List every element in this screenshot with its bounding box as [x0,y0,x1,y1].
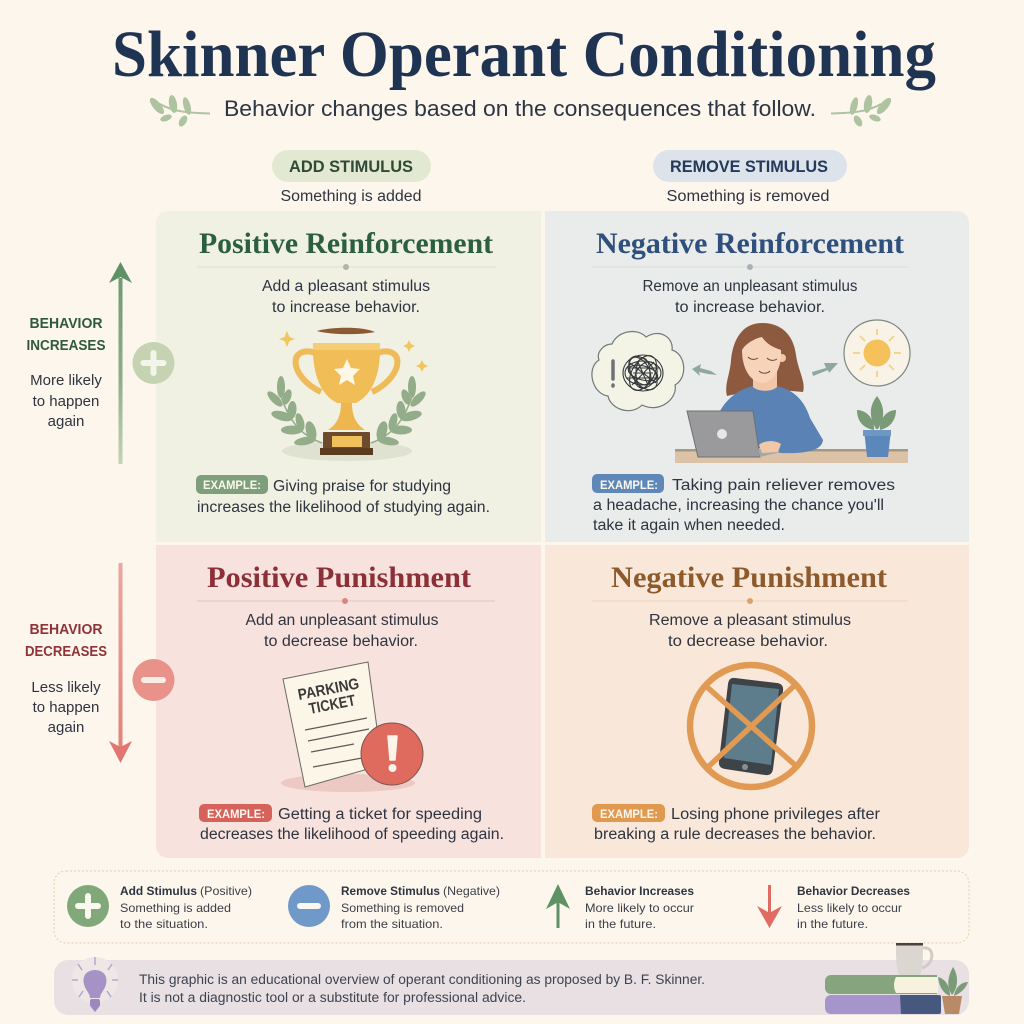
legend: behavior increases: More likely to occur [585,901,694,915]
example: positive punishment [199,804,504,843]
column header: remove stimulus [653,150,847,205]
subtitle with leaf ornaments: Behavior changes based on the consequences that follow. [224,96,816,121]
example: positive reinforcement: EXAMPLE: [203,478,261,492]
legend: add stimulus: (Positive) [200,884,252,898]
example: positive punishment: EXAMPLE: [207,807,265,821]
axis: behavior decreases: BEHAVIOR [30,622,103,638]
example: negative reinforcement: EXAMPLE: [600,478,658,492]
icon: trophy with laurel [265,328,428,461]
icon: light bulb [72,957,118,1012]
icon: books, coffee and plant [825,943,968,1014]
icon: potted plant [857,396,896,457]
icon: woman at laptop [675,323,908,463]
legend: behavior increases [546,884,694,931]
legend: remove stimulus [288,884,500,931]
panel: positive reinforcement [156,211,541,542]
example: positive reinforcement: Giving praise for studying [273,478,451,495]
panel: negative punishment: Remove a pleasant stimulus [649,612,851,629]
axis: behavior decreases: Less likely [31,679,101,696]
icon: thought cloud with scribble [592,332,684,411]
example: negative punishment [592,804,880,843]
legend: behavior decreases: in the future. [797,917,868,931]
legend: remove stimulus: from the situation. [341,917,443,931]
example: positive punishment: decreases the likelihood of speeding again. [200,826,504,843]
icon: parking ticket with alert [281,662,423,792]
example: positive punishment: Getting a ticket for speeding [278,806,482,823]
axis: behavior increases: BEHAVIOR [30,316,103,332]
icon: parking ticket with alert: TICKET [308,692,357,718]
column header: remove stimulus: REMOVE STIMULUS [670,158,828,176]
column header: add stimulus: ADD STIMULUS [289,158,413,176]
legend: behavior decreases: Less likely to occur [797,901,902,915]
legend: add stimulus [67,884,252,931]
axis: behavior increases: again [48,413,84,430]
axis: behavior increases: INCREASES [26,338,106,354]
legend: add stimulus: to the situation. [120,917,208,931]
example: negative reinforcement: take it again when needed. [593,517,785,534]
example: negative reinforcement: a headache, increasing the chance you'll [593,497,884,514]
legend: remove stimulus: (Negative) [443,884,500,898]
example: negative punishment: breaking a rule decreases the behavior. [594,826,876,843]
legend: behavior decreases [757,884,910,931]
panel: positive reinforcement: Positive Reinforcement [199,227,493,260]
legend: behavior increases: Behavior Increases [585,884,694,898]
legend: remove stimulus: Remove Stimulus [341,884,440,898]
example: positive reinforcement [196,475,490,516]
example: negative reinforcement [592,474,895,534]
icon: parking ticket with alert: PARKING [297,675,361,704]
axis: behavior decreases [25,563,174,763]
panel: positive punishment [156,545,541,858]
legend: remove stimulus: Something is removed [341,901,464,915]
column header: add stimulus [272,150,431,205]
legend: behavior increases: in the future. [585,917,656,931]
panel: negative punishment: to decrease behavior. [668,633,828,650]
panel: positive punishment: Add an unpleasant stimulus [246,612,439,629]
disclaimer panel [54,943,969,1015]
axis: behavior decreases: DECREASES [25,644,107,660]
legend: add stimulus: Something is added [120,901,231,915]
panel: positive punishment: Positive Punishment [207,561,471,594]
icon: sun [844,320,910,386]
panel: positive reinforcement: Add a pleasant stimulus [262,278,430,295]
legend: behavior decreases: Behavior Decreases [797,884,910,898]
panel: positive punishment: to decrease behavior. [264,633,418,650]
panel: negative reinforcement: Remove an unpleasant stimulus [642,278,858,295]
panel: positive reinforcement: to increase behavior. [272,299,420,316]
column header: add stimulus: Something is added [280,188,422,205]
example: negative punishment: EXAMPLE: [600,807,658,821]
subtitle with leaf ornaments [148,94,893,128]
example: negative punishment: Losing phone privileges after [671,806,880,823]
example: negative reinforcement: Taking pain reliever removes [672,477,895,494]
title: Skinner Operant Conditioning [112,18,936,91]
axis: behavior increases: More likely [30,372,102,389]
panel: negative reinforcement: to increase behavior. [675,299,825,316]
disclaimer panel: This graphic is an educational overview of operant conditioning as proposed by B. F. Skinner. [139,972,705,987]
panel: negative reinforcement: Negative Reinforcement [596,227,904,260]
panel: negative punishment: Negative Punishment [611,561,887,594]
icon: arrows [692,363,838,376]
legend panel [54,871,969,943]
axis: behavior decreases: again [48,719,84,736]
disclaimer panel: It is not a diagnostic tool or a substitute for professional advice. [139,990,526,1005]
axis: behavior increases: to happen [33,393,99,410]
axis: behavior decreases: to happen [33,699,99,716]
axis: behavior increases [26,262,174,464]
legend: add stimulus: Add Stimulus [120,884,197,898]
panel: negative reinforcement [545,211,969,542]
icon: crossed out phone [690,665,812,787]
example: positive reinforcement: increases the likelihood of studying again. [197,499,490,516]
column header: remove stimulus: Something is removed [666,188,830,205]
panel: negative punishment [545,545,969,858]
